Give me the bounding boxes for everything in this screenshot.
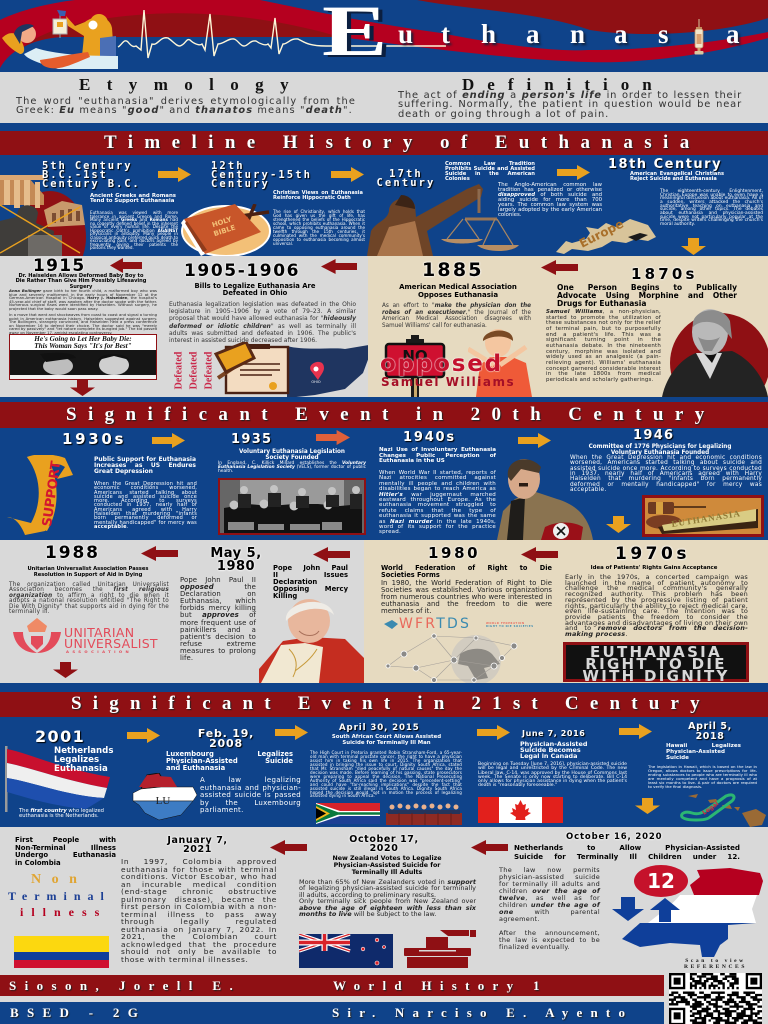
heading: World Federation: [381, 565, 552, 579]
text: Hawaii: The legislation in Hawaii, which is based on the law in Oregon, allows doctors to issue prescriptions for life-ending substances to people who are terminally ill who are mentally competent and have a prognosis of at least six months to live. A pair of doctors are required to verify the final diagnosis.: [648, 764, 757, 789]
arrow left: [270, 840, 307, 855]
year: 1915: 1915: [33, 256, 86, 276]
banner: Significant Event in 21st Century: [0, 692, 768, 717]
heading: Luxembourg: Physician-Assisted Suicide: [166, 757, 293, 765]
heading: Common Law: Common Law Tradition Prohibits Suicide and Assisted Suicide in the American Colonies: [445, 161, 535, 182]
heading: Pope John Paul II: Declaration: [273, 578, 317, 586]
icon: support ribbon: SUPPORT: [40, 460, 64, 528]
year: May 5, 1980: May 5,: [210, 546, 262, 561]
heading: New Zealand: [310, 855, 464, 876]
clipping headline: He's Going to Let Her Baby Die:: [34, 335, 132, 343]
map: Netherlands under 12: [610, 865, 768, 959]
heading: First People: Undergo Euthanasia: [15, 851, 116, 859]
year: 1946: 1946: [633, 428, 674, 443]
heading: Netherlands children: [514, 844, 740, 861]
heading: Pope John Paul II: II Issues: [273, 571, 348, 579]
text: scan to view references: Scan to view: [685, 958, 746, 964]
icon: ballot box: [404, 928, 476, 968]
icon: clipboard and gavel: [214, 342, 290, 394]
icon: holy bible: [181, 204, 271, 256]
footer: student name and subject: World History 1: [333, 978, 548, 993]
text: American Evangelical: The eighteenth-century Enlightenment, Christian Europe was unable to even have a meaningful discussion about euthanasia. All of a sudden, writers attacked the church's authoritative teaching on euthanasia and suicide, among other topics. The debates about euthanasia and physician-assisted suicide were not particularly popular at the time, despite writers challenging the church's moral authority.: [660, 189, 763, 227]
heading: World Federation: World Federation of Right to Die: [381, 564, 552, 572]
heading: Hawaii: Physician-Assisted: [666, 749, 725, 755]
map: Hawaii legal: Legal: [701, 800, 720, 817]
text: New Zealand: [299, 879, 476, 918]
title: Euthanasia: a: [526, 19, 540, 49]
panel: gray row Colombia to Netherlands: [0, 827, 768, 1024]
heading: Committee of 1776: [565, 444, 755, 457]
heading: Dr. Haiselden: Die Rather Than Give Him Possibly Lifesaving: [16, 278, 146, 284]
heading: Luxembourg: [166, 751, 293, 772]
year: 12th Century-15th Century: 12th: [211, 160, 245, 172]
year: 2001: 2001: [35, 727, 85, 746]
year: April 30, 2015: April 30, 2015: [339, 723, 420, 733]
year: 1980: 1980: [428, 544, 480, 562]
heading: New Zealand: Physician-Assisted Suicide for: [334, 862, 440, 869]
flag: Canada: [478, 797, 563, 823]
heading: South African Court: [314, 735, 459, 746]
image: newspaper clipping: [9, 334, 157, 380]
heading: One Person: Advocate Using Morphine and Other: [557, 291, 737, 300]
heading: Nazi Use: Nazi Use of Involuntary Euthanasia Changes Public Perception of Euthanasia in the US: [379, 447, 496, 464]
arrow: [477, 725, 510, 740]
heading: South African Court: South African Court Allows Assisted: [332, 734, 441, 740]
clipping headline: [34, 335, 132, 350]
text: South African Court: The High Court in Pretoria granted Robin Stransham-Ford, a 65-year-old man with terminal prostate cancer, the right to have a physician assist him in taking his own life in 2015. The organization that assisted in bringing the issue to court, Dignity South Africa, stated that Mr. Stransham "died peacefully of natural causes" the day the decision was made. Before learning of his passing, state prosecutors were preparing to appeal the decision. The National Prosecuting Authority of South Africa said the decision was "precedent-setting" and could have "far-reaching implications" despite the fact that assisted suicide is still illegal in South Africa. Dignity South Africa hoped the decision would "set in motion the process of legalizing assisted dying in South Africa.": [310, 750, 462, 798]
heading: First People: First People with: [15, 836, 116, 844]
arrow left: [541, 260, 578, 275]
year: 1988: 1988: [45, 543, 100, 563]
text: Defeated columns: Defeated: [188, 352, 200, 389]
heading: New Zealand: Terminally Ill Adults: [352, 869, 422, 876]
year: 1940s: 1940s: [403, 430, 456, 445]
heading: Hawaii: [666, 744, 741, 762]
text: scan to view references: REFERENCES: [684, 964, 747, 970]
callout: Euthanasia right to die with dignity: RIGHT TO DIE: [585, 655, 727, 673]
label: Samuel Williams: Samuel Williams: [381, 375, 515, 389]
text: Voluntary Euthanasia: In England, C. Killick Millard establishes the Voluntary Euthanasia Legislation Society (VELS), former doctor of public health.: [218, 461, 366, 474]
heading: Unitarian: Resolution in Support of Aid in Dying: [34, 572, 142, 578]
text: Canada: Beginning on Tuesday [June 7, 2016], physician-assisted suicide will be legal and unrestricted by the Criminal Code. The new Liberal law, C-14, was approved by the House of Commons last week. The Senate is only now starting to deliberate. Bill C-14 only allows for physician assistance in dying when the patient's death is "reasonably foreseeable.": [478, 762, 627, 788]
arrow: [619, 724, 652, 739]
year: October 17, 2020: 2020: [370, 843, 398, 854]
heading: Physician-Assisted Canada: [520, 741, 608, 760]
heading: Pope John Paul II: Pope John Paul: [273, 564, 348, 572]
year: October 17, 2020: [333, 835, 435, 853]
logo: Unitarian Universalist Association: UNIVERSALIST: [64, 636, 158, 650]
heading: First People: Non-Terminal Illness: [15, 844, 116, 852]
text: Common Law: The Anglo-American common law tradition has penalized or otherwise disapproved of both suicide and aiding suicide for more than 700 years. The common law system was largely adopted by the early American colonies.: [498, 182, 602, 218]
arrow left: [471, 840, 508, 855]
heading: Bills: Bills to Legalize Euthanasia Are: [194, 282, 315, 290]
text: Non Terminal illness: illness: [20, 905, 107, 919]
year: 5th Century B.C.-1st Century B.C.: [42, 160, 141, 190]
arrow left: [313, 547, 350, 562]
icon: holy bible: BIBLE: [213, 224, 237, 238]
year: 1970s: 1970s: [615, 544, 690, 564]
heading: Christian Views: Christian Views on Euthanasia Reinforce Hippocratic Oath: [273, 190, 363, 201]
text: Defeated columns: [174, 352, 214, 390]
heading: Netherlands Legalizes: Netherlands Legalizes Euthanasia: [54, 746, 113, 774]
image: Hitler portrait: [497, 455, 593, 540]
image: portrait of Samuel Williams: [662, 309, 768, 397]
logo: WFRTDS: WFRTDS: [399, 616, 471, 632]
logo: WFRTDS: [384, 619, 534, 631]
text: Colombia: In 1997, Colombia approved euthanasia for those with terminal conditions. Victor Escobar, who had an incurable medical condition (end-stage chronic obstructive pulmonary disease), became the first person in Colombia with a non-terminal illness to pass away through legally regulated euthanasia on January 7, 2022. In 2021, the Colombian court acknowledged that the procedure should not only be available to those with terminal illnesses.: [121, 857, 277, 964]
arrow: [127, 728, 160, 743]
text: Christian Views: The rise of Christianity, which holds that God has given us the gift of life, has strengthened the beliefs of the Hippocratic school, which prohibits euthanasia. When it came to opposing euthanasia around the twelfth through the 15th centuries, it culminated with the medical community's opposition to euthanasia becoming almost universal.: [273, 209, 365, 246]
arrow left: [141, 546, 178, 561]
heading: Unitarian: Unitarian Universalist Association Passes: [27, 566, 149, 572]
year: 1935: 1935: [231, 432, 272, 447]
illustration: patient and nurse: [2, 10, 118, 69]
panel: beige row 1980 and 1970s: [364, 540, 768, 683]
text: Idea of Patients' Rights: Early in the 1970s, a concerted campaign was launched in the name of patient autonomy to challenge the medical community's generally recognized authority. This problem has been represented by the progressive listing of patient rights, particularly the ability to reject medical care, even life-sustaining care. The intention was to provide patients the freedom to consider the advantages and disadvantages of living on their own and to remove doctors from the decision-making process.: [565, 573, 748, 638]
map: Europe: Europe: [577, 217, 626, 251]
image: lady justice statue: [367, 184, 519, 256]
text: Pope declaration: Pope John Paul II opposed the Declaration on Euthanasia, which forbids mercy killing but approves of more frequent use of painkillers and a patient's decision to refuse extreme measures to prolong life.: [180, 576, 256, 662]
text: definition: The act of ending a person's life in order to lessen their suffering. Normally, the patient in question would be near death or going through a lot of pain.: [398, 90, 742, 120]
year: 17th Century: Century: [377, 177, 435, 189]
title: Euthanasia: s: [658, 19, 669, 49]
heading: Luxembourg: Luxembourg Legalizes: [166, 750, 293, 758]
arrow down: [635, 798, 660, 814]
heading: Netherlands children: Netherlands to Allow Physician-Assisted: [514, 843, 740, 852]
title: Euthanasia: t: [441, 19, 450, 49]
heading: Voluntary Euthanasia: Voluntary Euthanasia Legislation: [239, 449, 345, 455]
heading: First People: [15, 837, 116, 867]
heading: Voluntary Euthanasia: Society Founded: [265, 455, 319, 461]
text: Non Terminal illness: Non: [31, 872, 87, 887]
year: May 5, 1980: 1980: [217, 558, 255, 574]
text: Defeated columns: Defeated: [204, 352, 214, 389]
year: 12th Century-15th Century: Century: [211, 178, 270, 190]
flag: Colombia: [14, 936, 109, 968]
title: Euthanasia: n: [570, 19, 585, 49]
icon: 12 circle: [634, 865, 688, 897]
text: AMA: As an effort to "make the physician don the robes of an executioner," the Journal of the American Medical Association disagrees with Samuel Williams' call for euthanasia.: [382, 303, 531, 329]
text: World Federation: In 1980, the World Federation of Right to Die Societies was established. Various organizations from numerous countries who were interested in euthanasia and the freedom to die were members of it.: [381, 579, 552, 615]
year: 5th Century B.C.-1st Century B.C.: B.C.-1st: [42, 169, 108, 181]
map: Europe: [556, 217, 656, 254]
heading: One Person: [557, 283, 737, 308]
title: Euthanasia: u: [398, 19, 413, 49]
label: opposed: opposed: [380, 351, 503, 377]
text: Unitarian: The organization called Unitarian Universalist Association becomes the first religious organization to affirm a right to die when it adopts a national resolution entitled "The Right to Die With Dignity" that supports aid in dying for the terminally ill.: [9, 582, 169, 615]
arrow: [158, 167, 191, 182]
footer: section and teacher: BSED - 2G: [10, 1005, 146, 1020]
logo: Unitarian Universalist Association: UNITARIAN: [64, 625, 134, 640]
year: January 7, 2021: January 7,: [167, 835, 228, 846]
flag: New Zealand: [299, 934, 393, 968]
text: scan to view references: [669, 958, 762, 970]
arrow: [518, 433, 551, 448]
heading: Bills: Defeated in Ohio: [223, 289, 287, 297]
footer: section and teacher: Sir. Narciso E. Ayento: [332, 1005, 633, 1020]
banner: Significant Event in 21st Century: Significant Event in 21st Century: [71, 693, 711, 714]
text: law now permits: After the announcement, the law is expected to be finalized eventually.: [499, 929, 600, 951]
callout: Euthanasia right to die with dignity: [563, 642, 749, 682]
banner: Timeline History of Euthanasia: Timeline History of Euthanasia: [104, 132, 701, 153]
year: May 5, 1980: [196, 548, 276, 573]
arrow up blue: [650, 898, 680, 922]
heading: Pope John Paul II: Opposing Mercy: [273, 585, 348, 593]
panel: timeline row blue: [0, 155, 768, 256]
clipping headline: This Woman Says "It's for Best": [34, 342, 132, 350]
heading: AMA: [399, 283, 517, 299]
heading: Bills: [194, 282, 316, 297]
map: Luxembourg: [131, 773, 201, 821]
year: Feb. 19, 2008: Feb. 19,: [198, 727, 254, 740]
year: January 7, 2021: 2021: [183, 844, 212, 855]
panel: gray row 1915 to 1905: [0, 256, 368, 397]
text: Dr. Haiselden: Anna Bollinger gave birth to her fourth child, a malformed boy who was blue and severely malformed, in the early hours of November 12 at the German-American Hospital in Chicago. Harry J. Haiselden, the hospital's 45-year-old chief of staff, was awoken after the doctor spoke with the father. Numerous surgical flaws were identified by Haiselden. Without surgery, he projected that the baby would soon pass away. In a move that went and shockwaves from coast to coast and signal a turning point in American euthanasia history, Haiselden suggested against surgery. The Bollingers, strangely convinced, and Haiselden held a press conference on November 16 to defend their choice. The doctor said he was "merely cared by passively" and "let nature complete its bungled job." The kid passed away on November 17, amidst escalating controversy.: [9, 288, 157, 334]
year: October 16, 2020: October 16, 2020: [566, 832, 662, 842]
year: 12th Century-15th Century: Century-15th: [211, 169, 312, 181]
year: April 5, 2018: April 5,: [688, 721, 732, 732]
banner: Timeline History of Euthanasia: [0, 131, 768, 155]
icon: syringe: [694, 19, 704, 54]
panel: etymology and definition: [0, 72, 768, 123]
image: Greek and Roman ruins with cross: [0, 175, 86, 256]
banner: Significant Event in 20th Century: [0, 402, 768, 428]
heading: American Evangelical: American Evangelical Christians Reject Suicide and Euthanasia: [630, 171, 724, 182]
heading: Netherlands children: Suicide for Terminally Ill Children under 12.: [514, 852, 740, 861]
heading: Public Support: Public Support for Euthanasia Increases as US Endures Great Depression: [94, 456, 196, 475]
heading: Dr. Haiselden: [16, 273, 146, 290]
heading: Committee of 1776: Committee of 1776 Physicians for Legalizing: [589, 444, 731, 450]
heading: Physician-Assisted Canada: Physician-Assisted: [520, 740, 587, 748]
arrow left: [321, 259, 357, 274]
heading: Physician-Assisted Canada: Suicide Becomes: [520, 746, 581, 754]
heading: Unitarian: [6, 567, 170, 578]
logo: WFRTDS: RIGHT TO DIE SOCIETIES: [486, 625, 534, 628]
text: Committee of 1776: When the Great Depression hit and economic conditions worsened, Americans started talking about suicide and assisted suicide once more. According to surveys conducted in 1937, nearly half of Americans agreed with Harry Haiselden that murdering "infants born permanently deformed or mentally handicapped" for mercy was acceptable.: [570, 455, 762, 493]
year: 12th Century-15th Century: [211, 160, 312, 190]
title: Euthanasia: [322, 0, 742, 71]
year: April 5, 2018: 2018: [696, 731, 724, 742]
heading: Dr. Haiselden: Dr. Haiselden Allows Deformed Baby Boy to: [19, 273, 143, 279]
year: 5th Century B.C.-1st Century B.C.: 5th Century: [42, 160, 132, 172]
text: law legalizing: A law legalizing euthanasia and physician-assisted suicide is passed by the Luxembourg parliament.: [200, 776, 301, 814]
heading: Physician-Assisted Canada: Legal in Canada: [520, 752, 577, 760]
heading: AMA: American Medical Association: [399, 283, 517, 291]
flag: South Africa: [316, 803, 380, 824]
text: New Zealand: More than 65% of New Zealanders voted in support of legalizing physician-assisted suicide for terminally ill adults, according to preliminary results.: [299, 878, 476, 899]
heading: AMA: Opposes Euthanasia: [418, 291, 498, 299]
heading: New Zealand: New Zealand Votes to Legalize: [332, 855, 442, 862]
QR code: [669, 973, 762, 1024]
image: gavel and Euthanasia plaque: EUTHANASIA: [671, 508, 741, 529]
title: Euthanasia: h: [481, 19, 496, 49]
text: Ancient Greeks: Euthanasia was viewed with more tolerance in ancient Greece and Rome. Many ancient Greeks and Romans had no cogently defined belief in the inherent value of every human life. Despite the Hippocratic Oath's prohibition AGAINST physicians in antiquity. Many people in classical antiquity preferred quick death to excruciating pain, and doctors agreed by frequently giving their patients the poisons they wanted.: [90, 210, 178, 250]
heading: Pope John Paul II: [273, 565, 348, 600]
arrow left: [521, 547, 558, 562]
panel: gray row 1988 and May 1980: [0, 540, 364, 683]
logo: Unitarian Universalist Association: [13, 618, 171, 654]
title: Euthanasia: a: [726, 19, 740, 49]
arrow left: [110, 258, 142, 273]
text: first country: The first country who legalized euthanasia is the Netherlands.: [19, 808, 104, 819]
year: 5th Century B.C.-1st Century B.C.: Century B.C.: [42, 178, 141, 190]
year: April 5, 2018: [670, 722, 750, 741]
footer: section and teacher: [0, 1002, 664, 1024]
year: 1930s: 1930s: [62, 430, 126, 448]
arrow down: [53, 662, 78, 678]
map: Ohio: OHIO: [311, 380, 321, 384]
text: Samuel Williams: Samuel Williams, a non-physician, started to promote the utilization of these substances not only for the relief of terminal pain, but to purposefully end a patient's life. This was a significant turning point in the euthanasia debate. In the nineteenth century, morphine was isolated and widely used as an analgesic (a pain-relieving agent). Williams' euthanasia concept garnered considerable interest in the late 1800s from medical periodicals and scholarly gatherings.: [546, 309, 661, 383]
arrow: [557, 165, 590, 180]
panel: beige row 1885 to 1870s: [368, 256, 768, 397]
year: 1870s: 1870s: [631, 265, 698, 283]
text: etymology: The word "euthanasia" derives etymologically from the Greek: Eu means "good" and thanatos means "death".: [16, 96, 356, 116]
year: 1905-1906: 1905-1906: [184, 261, 300, 281]
title: Euthanasia: a: [614, 19, 628, 49]
callout: Euthanasia right to die with dignity: EUTHANASIA: [590, 643, 722, 661]
heading: Idea of Patients' Rights: Idea of Patients' Rights Gains Acceptance: [591, 565, 717, 571]
heartbeat line: [118, 10, 446, 58]
heading: Definition: Definition: [462, 75, 665, 94]
year: 17th Century: [377, 168, 435, 190]
panel: 21st century blue row: [0, 717, 768, 827]
heading: One Person: One Person Begins to Publically: [557, 283, 737, 292]
image: network globe: [384, 632, 524, 684]
icon: no sign: [384, 335, 446, 397]
icon: holy bible: HOLY: [211, 215, 234, 229]
icon: 12 circle: 12: [647, 869, 675, 893]
heading: Committee of 1776: Voluntary Euthanasia Founded: [611, 450, 709, 456]
arrow down: [681, 238, 706, 255]
text: Non Terminal illness: Terminal: [8, 889, 111, 903]
footer: student name and subject: Sioson, Jorell E.: [9, 978, 241, 993]
year: Feb. 19, 2008: [186, 729, 266, 748]
arrow: [316, 430, 350, 445]
arrow: [152, 433, 185, 448]
year: 18th Century: 18th Century: [608, 157, 722, 172]
logo: WFRTDS: WORLD FEDERATION: [486, 622, 525, 625]
footer: student name and subject: [0, 975, 664, 996]
text: Defeated columns: Defeated: [174, 352, 184, 389]
text: Nazi Use: When World War II started, reports of Nazi atrocities committed against mentally ill people and children with disabilities began to reach America as Hitler's war juggernaut marched eastward throughout Europe. As the euthanasia movement struggled to refute claims that the type of euthanasia it supported was the same as Nazi murder in the late 1940s, word of its support for the practice spread.: [379, 470, 496, 535]
heading: Hawaii: Suicide: [666, 755, 689, 761]
header banner: [0, 0, 768, 71]
logo: Unitarian Universalist Association: ASSOCIATION: [66, 649, 132, 654]
map: Luxembourg: LU: [156, 795, 170, 807]
image: Pope John Paul II: [259, 599, 365, 683]
heading: Dr. Haiselden: Surgery: [70, 284, 92, 290]
heading: World Federation: Societies Forms: [381, 571, 440, 579]
heading: Hawaii: Hawaii Legalizes: [666, 743, 741, 749]
heading: Luxembourg: and Euthanasia: [166, 764, 225, 772]
arrow down blue: [612, 897, 644, 921]
panel: 20th century blue row: [0, 428, 768, 540]
heading: One Person: Drugs for Euthanasia: [557, 299, 646, 308]
year: Feb. 19, 2008: 2008: [209, 737, 243, 750]
arrow: [275, 725, 308, 740]
heading: South African Court: Suicide for Terminally Ill Man: [342, 740, 431, 746]
text: law now permits: [499, 867, 600, 951]
year: June 7, 2016: June 7, 2016: [522, 729, 585, 738]
year: 1885: 1885: [422, 259, 484, 281]
illustration: man crossing arms: [468, 329, 532, 397]
icon: no sign: NO: [402, 347, 428, 365]
image: gavel and Euthanasia plaque: [642, 495, 764, 537]
heading: Pope John Paul II: Killing: [273, 592, 297, 600]
arrow: [331, 167, 364, 182]
text: New Zealand: Only terminally sick people from New Zealand over above the age of eighteen with less than six months to live will be subject to the law.: [299, 897, 476, 918]
icon: support ribbon: [7, 455, 75, 537]
heading: Etymology: Etymology: [79, 75, 305, 94]
text: law now permits: The law now permits physician-assisted suicide for terminally ill adults and children over the age of twelve, as well as for children under the age of one with parental agreement.: [499, 866, 600, 923]
heading: Voluntary Euthanasia: [218, 450, 366, 462]
map: Hawaii legal: [678, 793, 768, 827]
year: January 7, 2021: [150, 836, 245, 855]
arrow down: [606, 516, 631, 533]
year: October 17, 2020: October 17,: [349, 834, 419, 845]
text: Non Terminal illness: [0, 873, 120, 929]
banner: Significant Event in 20th Century: Significant Event in 20th Century: [66, 404, 716, 425]
text: Bills: Euthanasia legalization legislation was defeated in the Ohio legislature in 1905–1906 by a vote of 79–23. A similar proposal that would have allowed euthanasia for "hideously deformed or idiotic children" as well as terminally ill adults was submitted and defeated in 1906. The public's interest in assisted suicide decreased after 1906.: [169, 301, 356, 344]
illustration: court bench: [386, 802, 462, 825]
heading: First People: in Colombia: [15, 858, 61, 866]
arrow down: [70, 380, 95, 396]
text: Public Support: When the Great Depression hit and economic conditions worsened, Americans started talking about suicide and assisted suicide once more. According to surveys conducted in 1937, nearly half of Americans agreed with Harry Haiselden that murdering "infants born permanently deformed or mentally handicapped" for mercy was acceptable.: [94, 481, 197, 530]
year: 17th Century: 17th: [389, 168, 423, 180]
image: Netherlands flag: [2, 746, 114, 812]
heading: Ancient Greeks: Ancient Greeks and Romans Tend to Support Euthanasia: [90, 193, 176, 204]
map: Ohio: [287, 345, 368, 397]
image: group photo: [218, 478, 366, 535]
